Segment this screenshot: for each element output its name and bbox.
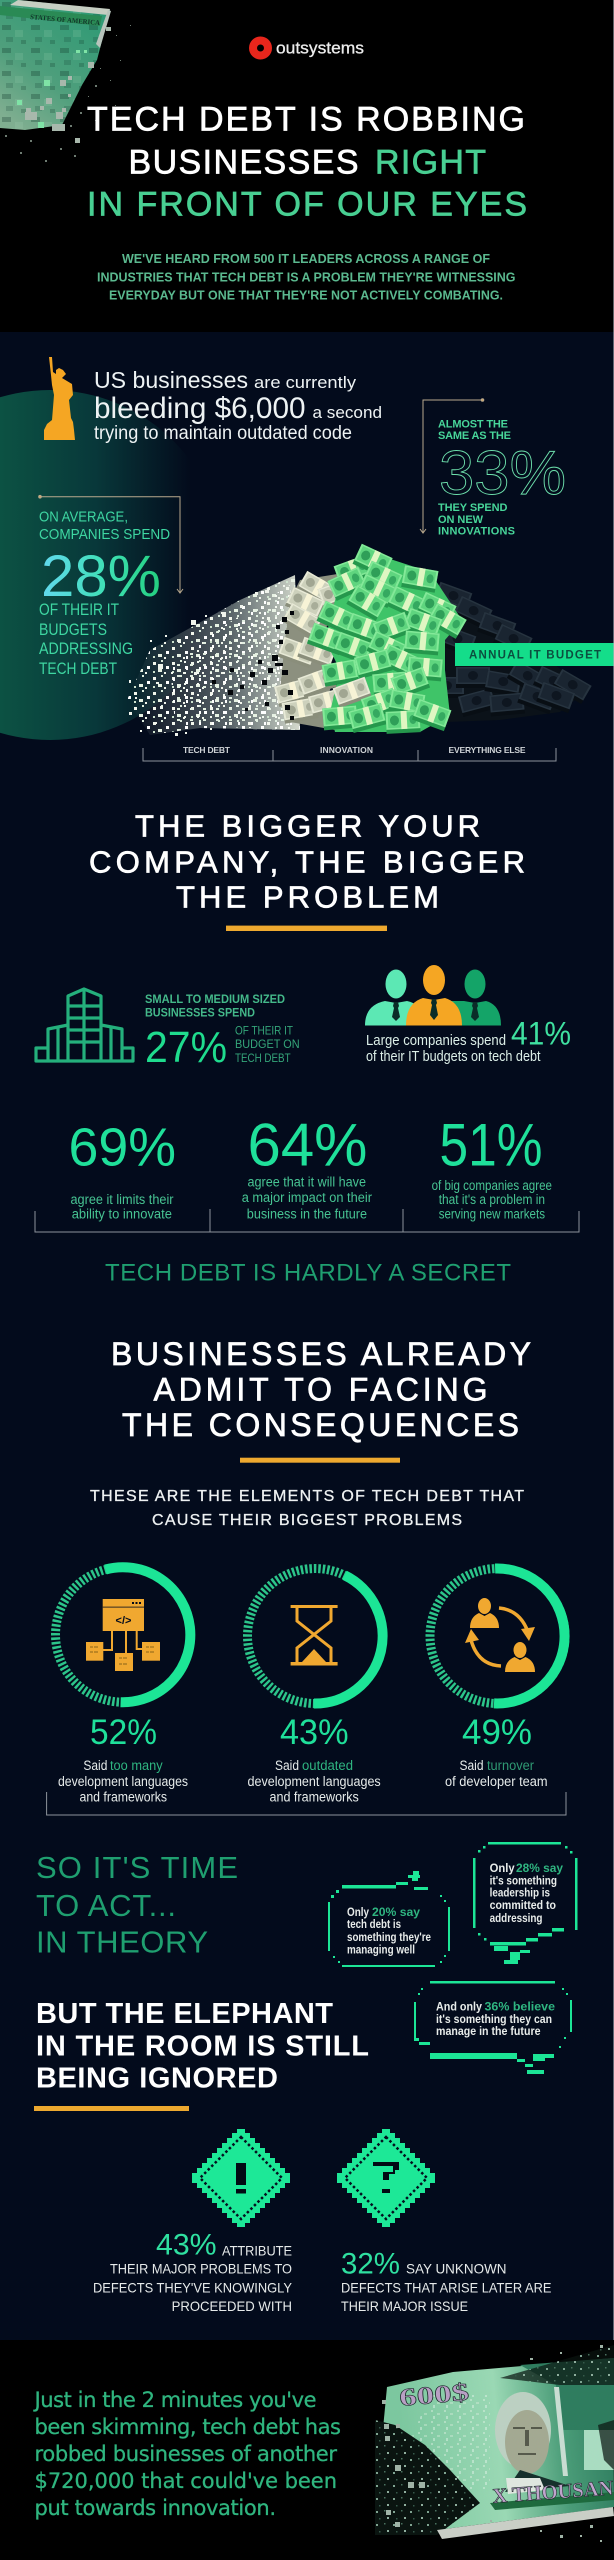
stat: large companies 41 percent — [366, 1016, 571, 1065]
stat: 69 percent: 69% — [68, 1117, 176, 1177]
right edge hairline — [613, 0, 614, 2340]
title: IN FRONT OF OUR EYES — [87, 185, 527, 223]
image: dissolving banknote: 600$ — [398, 2379, 470, 2412]
arrow: to 33 percent — [420, 399, 484, 533]
chart: 49 percent ring — [430, 1568, 565, 1704]
icon: question diamond — [337, 2129, 435, 2227]
text: six thousand a second: trying to maintain outdated code — [94, 423, 352, 444]
stat: 49 percent: 49% — [462, 1713, 532, 1752]
stat: small and medium businesses 27 percent: 27% — [145, 1023, 227, 1072]
stat: 51 percent: 51% — [440, 1111, 542, 1178]
stat: 33 percent: THEY SPEND — [438, 502, 508, 514]
subheading: hardly a secret: TECH DEBT IS HARDLY A SECRET — [105, 1260, 511, 1287]
text: closing statement: robbed businesses of another — [34, 2442, 337, 2466]
stat: 64 percent: a major impact on their — [242, 1190, 372, 1205]
stat: 43 percent attribute: 43% — [156, 2229, 217, 2262]
axis: budget split: INNOVATION — [320, 745, 373, 755]
heading: so it's time to act: IN THEORY — [36, 1924, 208, 1959]
title: BUSINESSES — [128, 143, 358, 181]
stat: 52 percent — [58, 1713, 188, 1805]
callout: 28 percent — [473, 1842, 578, 1964]
stat: 32 percent unknown: THEIR MAJOR ISSUE — [341, 2298, 468, 2314]
title: TECH DEBT IS ROBBING — [87, 101, 525, 139]
panel: footer — [0, 2340, 614, 2560]
stat: 49 percent: turnover — [487, 1758, 534, 1773]
stat: 51 percent: serving new markets — [439, 1206, 545, 1221]
stat: 33 percent: SAME AS THE — [438, 430, 511, 442]
stat: 64 percent: agree that it will have — [248, 1175, 366, 1190]
icon: people turnover — [465, 1598, 535, 1672]
icon: warning diamond — [192, 2129, 290, 2227]
stat: 28 percent: COMPANIES SPEND — [39, 526, 170, 543]
chart: 52 percent ring — [56, 1567, 190, 1702]
stat: 69 percent: ability to innovate — [72, 1206, 172, 1221]
heading: so it's time to act: TO ACT... — [36, 1888, 176, 1923]
stat: 32 percent unknown — [341, 2248, 552, 2314]
callout: 36 percent: And only — [436, 2000, 482, 2014]
stat: 32 percent unknown: DEFECTS THAT ARISE LATER ARE — [341, 2279, 552, 2295]
text: six thousand a second: a second — [312, 403, 382, 422]
stat: 28 percent: ON AVERAGE, — [39, 509, 128, 526]
text: six thousand a second: are currently — [254, 373, 357, 392]
callout: 20 percent: managing well — [347, 1944, 415, 1956]
stat: small and medium businesses 27 percent: BUDGET ON — [235, 1037, 300, 1051]
stat: 64 percent — [242, 1111, 372, 1221]
heading: elephant in the room — [34, 1998, 369, 2111]
stat: 51 percent: of big companies agree — [432, 1178, 552, 1193]
stat: 49 percent: of developer team — [445, 1774, 548, 1789]
stat: 33 percent: INNOVATIONS — [438, 526, 515, 538]
stat: small and medium businesses 27 percent: SMALL TO MEDIUM SIZED — [145, 992, 285, 1006]
heading — [111, 1336, 531, 1463]
stat: 28 percent: TECH DEBT — [39, 660, 117, 678]
stat: 52 percent: 52% — [90, 1713, 157, 1752]
panel: header — [0, 0, 614, 332]
panel: annual IT budget — [0, 357, 614, 761]
axis: budget split: TECH DEBT — [183, 745, 231, 755]
callout: 28 percent: it's something — [490, 1876, 557, 1888]
stat: small and medium businesses 27 percent: OF THEIR IT — [235, 1024, 294, 1038]
heading: so it's time to act: SO IT'S TIME — [36, 1850, 238, 1885]
heading: THE CONSEQUENCES — [122, 1407, 519, 1443]
intro text: EVERYDAY BUT ONE THAT THEY'RE NOT ACTIVELY COMBATING. — [109, 288, 503, 302]
logo: outsystems: outsystems — [276, 38, 364, 58]
heading: elephant in the room: IN THE ROOM IS STILL — [36, 2030, 369, 2062]
text: closing statement: $720,000 that could've been — [34, 2469, 337, 2493]
text: six thousand a second: US businesses — [94, 367, 248, 393]
text: closing statement — [32, 2388, 341, 2520]
stat: large companies 41 percent: 41% — [511, 1016, 571, 1052]
label: annual IT budget: ANNUAL IT BUDGET — [469, 650, 601, 662]
callout: 28 percent: Only — [490, 1863, 515, 1875]
image: dissolving dollar bill top left — [0, 0, 131, 162]
label: annual IT budget — [455, 643, 614, 666]
title: RIGHT — [375, 143, 486, 181]
callout: 36 percent: it's something they can — [436, 2012, 552, 2026]
callout: 20 percent: something they're — [347, 1932, 431, 1944]
stat: small and medium businesses 27 percent — [145, 992, 300, 1072]
text: six thousand a second: bleeding $6,000 — [94, 392, 306, 425]
callout: 28 percent: leadership is — [490, 1888, 550, 1900]
stat: 51 percent: that it's a problem in — [439, 1192, 545, 1207]
callout: 28 percent: addressing — [490, 1913, 542, 1925]
stat: 52 percent: Said — [83, 1758, 107, 1773]
callout: 28 percent: 28% say — [516, 1863, 564, 1875]
heading: elephant in the room: BUT THE ELEPHANT — [36, 1998, 333, 2030]
stat: 43 percent attribute: PROCEEDED WITH — [172, 2298, 292, 2314]
stat: 43 percent: 43% — [280, 1713, 349, 1752]
stat: 69 percent — [68, 1117, 176, 1221]
stat: 52 percent: development languages — [58, 1774, 188, 1789]
stat: 52 percent: too many — [110, 1758, 163, 1773]
panel: time to act — [34, 1842, 578, 2314]
intro text — [97, 252, 516, 302]
stat: 49 percent — [445, 1713, 548, 1789]
stat: 43 percent — [248, 1713, 381, 1805]
stat: 28 percent: 28% — [41, 544, 161, 609]
stat: 49 percent: Said — [460, 1758, 484, 1773]
stat: 32 percent unknown: SAY UNKNOWN — [406, 2261, 506, 2277]
image: dissolving banknote: X THOUSAN — [492, 2476, 614, 2508]
heading: so it's time to act — [36, 1850, 238, 1959]
arrow: to 28 percent — [39, 495, 183, 593]
heading — [89, 808, 525, 931]
chart: 43 percent ring — [248, 1568, 383, 1704]
subheading: CAUSE THEIR BIGGEST PROBLEMS — [152, 1512, 462, 1529]
intro text: WE'VE HEARD FROM 500 IT LEADERS ACROSS A RANGE OF — [122, 252, 490, 266]
stat: 43 percent: Said — [275, 1758, 299, 1773]
title — [87, 101, 527, 223]
callout: 20 percent: Only — [347, 1907, 370, 1919]
stat: 33 percent: 33% — [439, 439, 566, 508]
callout: 28 percent: committed to — [490, 1900, 556, 1912]
stat: 33 percent — [438, 419, 566, 538]
bracket under stats — [35, 1209, 579, 1232]
stat: 64 percent: 64% — [248, 1111, 368, 1178]
stat: 28 percent: ADDRESSING — [39, 640, 133, 658]
callout: 36 percent: manage in the future — [436, 2024, 541, 2038]
heading: BUSINESSES ALREADY — [111, 1336, 531, 1372]
image: pile of money dissolving into pixels — [127, 544, 592, 736]
subheading — [90, 1488, 524, 1529]
icon: three business people — [365, 965, 501, 1026]
stat: 33 percent: ON NEW — [438, 514, 484, 526]
stat: 43 percent attribute: DEFECTS THEY'VE KNOWINGLY — [93, 2279, 293, 2295]
heading: COMPANY, THE BIGGER — [89, 844, 525, 879]
intro text: INDUSTRIES THAT TECH DEBT IS A PROBLEM THEY'RE WITNESSING — [97, 271, 516, 285]
heading: THE BIGGER YOUR — [135, 808, 480, 844]
axis: budget split: EVERYTHING ELSE — [448, 745, 526, 755]
stat: 43 percent: and frameworks — [270, 1790, 359, 1805]
callout: 20 percent — [328, 1871, 450, 1967]
icon: statue of liberty — [44, 357, 75, 440]
text: six thousand a second — [94, 367, 382, 444]
stat: 43 percent: outdated — [302, 1758, 353, 1773]
stat: small and medium businesses 27 percent: TECH DEBT — [235, 1051, 291, 1065]
heading: THE PROBLEM — [176, 880, 439, 915]
callout: 36 percent: 36% believe — [484, 2000, 555, 2014]
stat: 32 percent unknown: 32% — [341, 2248, 400, 2281]
axis: budget split — [143, 745, 556, 761]
icon: hourglass — [291, 1605, 338, 1666]
panel: bigger company bigger problem — [35, 808, 579, 1287]
stat: 28 percent: OF THEIR IT — [39, 601, 119, 619]
stat: 33 percent: ALMOST THE — [438, 419, 508, 431]
icon: office buildings — [36, 989, 133, 1061]
subheading: THESE ARE THE ELEMENTS OF TECH DEBT THAT — [90, 1488, 524, 1505]
stat: 43 percent attribute: ATTRIBUTE — [222, 2242, 292, 2258]
stat: large companies 41 percent: Large companies spend — [366, 1033, 506, 1049]
icon: code window — [86, 1599, 160, 1671]
text: closing statement: Just in the 2 minutes you've — [32, 2388, 316, 2412]
stat: 43 percent: development languages — [248, 1774, 381, 1789]
callout: 36 percent — [414, 1981, 572, 2074]
stat: small and medium businesses 27 percent: BUSINESSES SPEND — [145, 1006, 255, 1020]
panel: consequences — [47, 1336, 566, 1815]
stat: large companies 41 percent: of their IT budgets on tech debt — [366, 1049, 540, 1065]
background glow — [0, 390, 225, 740]
callout: 20 percent: 20% say — [372, 1907, 421, 1919]
stat: 43 percent attribute: THEIR MAJOR PROBLEMS TO — [110, 2261, 292, 2277]
stat: 28 percent: BUDGETS — [39, 621, 107, 639]
heading: ADMIT TO FACING — [154, 1372, 488, 1408]
text: closing statement: been skimming, tech debt has — [34, 2415, 341, 2439]
stat: 43 percent attribute — [93, 2229, 293, 2314]
stat: 69 percent: agree it limits their — [70, 1192, 174, 1207]
callout: 20 percent: tech debt is — [347, 1919, 401, 1931]
icon: code window: </> — [116, 1615, 131, 1627]
image: dissolving banknote — [375, 2345, 614, 2542]
stat: 64 percent: business in the future — [247, 1206, 367, 1221]
bracket under rings — [47, 1792, 566, 1815]
stat: 52 percent: and frameworks — [80, 1790, 167, 1805]
text: closing statement: put towards innovation. — [34, 2496, 276, 2520]
stat: 28 percent — [39, 509, 170, 678]
stat: 51 percent — [432, 1111, 552, 1221]
image: dissolving dollar bill top left: STATES OF AMERICA — [30, 13, 100, 27]
heading: elephant in the room: BEING IGNORED — [36, 2062, 278, 2094]
